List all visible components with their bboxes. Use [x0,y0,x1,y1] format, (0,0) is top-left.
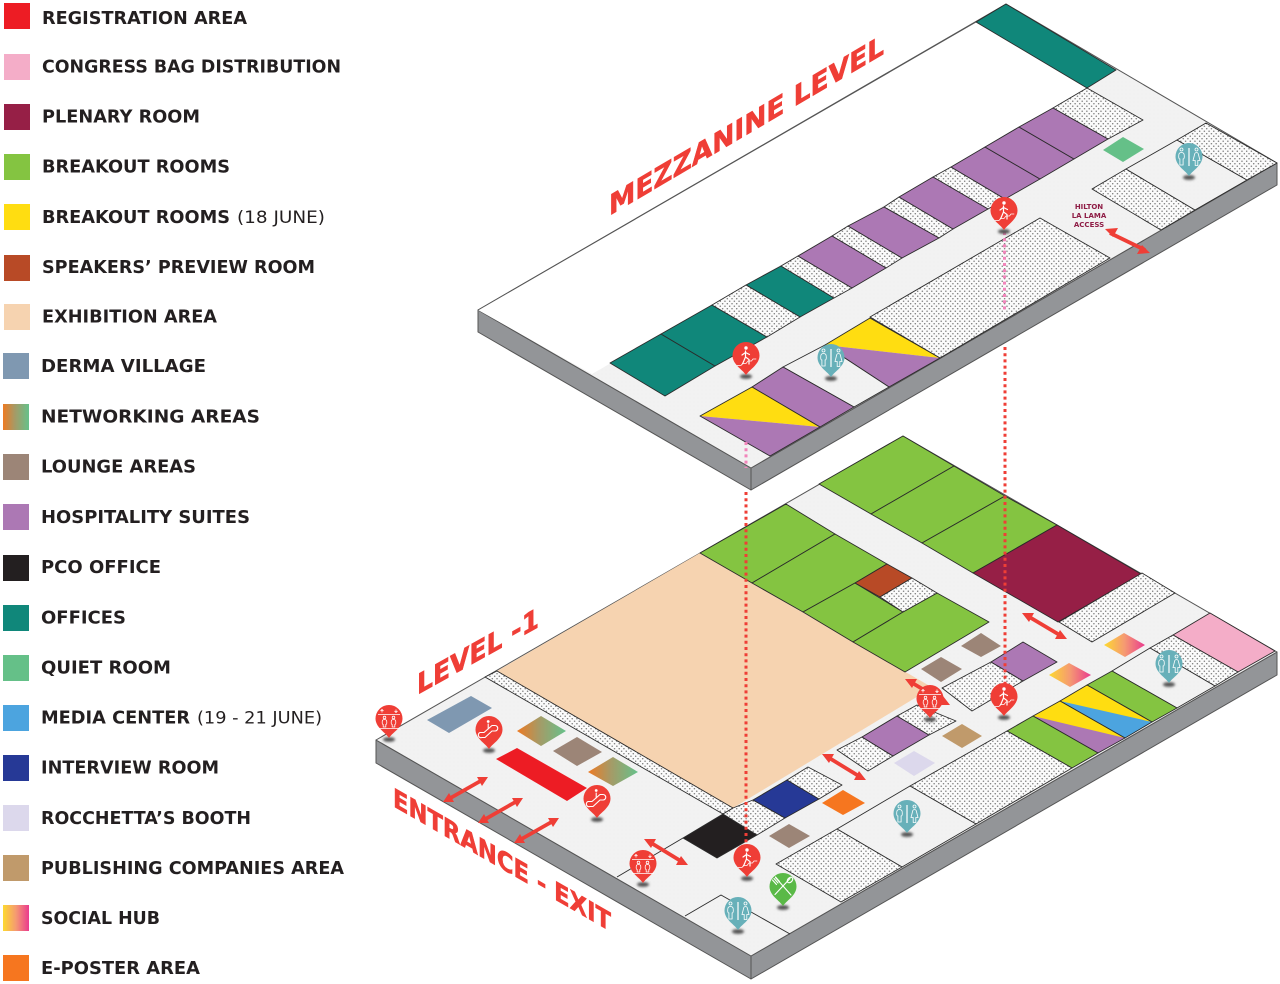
mezzanine slab [478,4,1277,490]
legend: lounge areas: LOUNGE AREAS [41,458,196,478]
hatched front room [776,829,902,902]
lounge area [961,633,1001,657]
lounge area [769,824,810,848]
social hub [1049,663,1091,687]
pin: escalator [584,785,610,822]
registration area [496,748,587,801]
breakout 18 june, lower [700,387,820,456]
connector: left red [744,492,748,845]
pin: toilets centre [894,800,920,837]
arrow: lift corridor [905,679,950,705]
networking area [588,757,638,786]
hospitality suites [798,108,1108,288]
title: mezzanine level: MEZZANINE LEVEL [609,29,884,223]
legend: derma village: DERMA VILLAGE [41,357,206,377]
legend: networking areas: NETWORKING AREAS [41,408,260,428]
toilets room right [1112,648,1215,708]
level -1 slab [376,436,1277,979]
pins [376,143,1202,934]
legend: quiet room: QUIET ROOM [41,658,171,678]
arrow: interview corridor [822,754,866,780]
legend: media center: MEDIA CENTER [41,708,191,728]
hatched room by lifts [942,662,1023,711]
legend: rocchetta's booth: ROCCHETTA’S BOOTH [41,809,251,829]
hatched room by interview [723,800,785,835]
arrow: entrance 1 [443,777,488,802]
legend: offices: OFFICES [41,608,126,628]
hatched front large room [910,731,1072,824]
hatched service room [880,578,937,612]
hospitality suite lower [752,367,854,427]
pin: toilets mezzanine right [1176,143,1202,180]
legend: quiet room [3,655,171,681]
pin: stairs level -1 left [734,844,760,881]
legend: social hub: SOCIAL HUB [41,909,160,929]
pin: restaurant [770,873,796,910]
congress bag distribution [1173,613,1275,672]
connector: right red [1004,347,1006,684]
connector: left pink [744,442,748,468]
pin: stairs mezzanine left [732,342,760,379]
pin: escalator [476,716,502,753]
arrow: entrance 3 [514,818,559,843]
pin: stairs level -1 right [990,683,1018,720]
quiet room [1103,137,1144,162]
legend: breakout rooms: BREAKOUT ROOMS [42,158,230,178]
legend: plenary room [4,104,200,130]
legend: breakout rooms 18 june: BREAKOUT ROOMS [42,208,230,228]
legend: breakout rooms 18 june: (18 JUNE) [237,208,325,228]
hilton la lama access label: HILTON [1075,203,1103,211]
legend: speakers preview room [4,255,315,281]
pin: toilets right [1156,650,1182,687]
networking area [517,716,566,746]
breakout 18 june, upper [825,318,940,387]
legend: rocchetta's booth [3,805,251,831]
legend: interview room [3,755,219,781]
derma village [427,696,492,733]
toilets room lower [783,345,889,407]
toilets room front [685,895,790,934]
legend: congress bag distribution [4,54,341,80]
offices back [976,4,1116,88]
pin: lift right [916,685,944,722]
legend: lounge areas [3,454,196,480]
void back edge line [478,22,976,310]
breakout rooms, left block [700,504,989,672]
connector lines between levels [746,232,1005,845]
legend: hospitality suites: HOSPITALITY SUITES [41,508,250,528]
panel: level -1 floor plan [376,436,1277,979]
large hatched area [870,218,1110,358]
open void [478,22,1087,374]
legend: publishing companies area [3,855,344,881]
hilton la lama access label: LA LAMA [1072,212,1107,220]
legend: publishing companies area: PUBLISHING COMPANIES AREA [41,859,344,879]
arrow: hilton access [1105,228,1150,254]
connector: right pink [1003,232,1006,311]
legend: derma village [3,353,206,379]
hospitality suite [862,716,929,756]
legend: pco office: PCO OFFICE [41,558,161,578]
breakout room front right [1087,671,1177,722]
pin: lift lobby [630,850,656,887]
legend: registration area: REGISTRATION AREA [42,9,247,29]
hatched corner room [1177,123,1277,180]
publishing companies area [942,724,982,748]
hatched room by lift [1092,169,1195,230]
toilets room centre [837,786,976,867]
legend: breakout rooms 18 june [4,204,325,230]
arrows [443,228,1150,865]
legend: speakers preview room: SPEAKERS’ PREVIEW ROOM [42,258,315,278]
legend: social hub [3,905,160,931]
breakout rooms, right block [819,436,1057,573]
pin: toilets mezzanine [818,344,844,381]
title: entrance - exit: ENTRANCE - EXIT [393,782,611,938]
hatched rooms [712,88,1143,337]
interview room [753,780,819,818]
legend: plenary room: PLENARY ROOM [42,108,200,128]
legend: offices [3,605,126,631]
hatched room near toilets [1150,635,1238,686]
hatched area behind plenary [1059,573,1175,642]
legend: media center [3,705,322,731]
legend [3,3,344,981]
hospitality suite [991,642,1057,681]
breakout 18 june and hospitality [1033,701,1125,753]
legend: registration area [4,3,247,29]
hilton la lama access label [1072,203,1107,229]
pin: lift entrance [376,705,402,742]
speakers preview room [855,564,912,597]
hatched room left of hospitality [837,737,893,771]
legend: e-poster area [3,955,200,981]
breakout room front [1007,716,1098,768]
panel: mezzanine level floor plan [478,4,1277,490]
title: level -1: LEVEL -1 [417,602,539,702]
lounge area [553,737,602,766]
exhibition area [497,553,928,808]
pin: toilets front [724,897,752,934]
entrance lobby wall [617,838,683,877]
toilets room [1126,140,1247,210]
legend: media center: (19 - 21 JUNE) [197,708,322,728]
pco office [683,814,757,858]
hatched room beside interview [787,767,842,799]
legend: breakout rooms [4,154,230,180]
hilton la lama access label: ACCESS [1074,221,1104,229]
hatched strip beside exhibition [485,671,733,814]
breakout 18 june and media center [1060,685,1152,738]
legend: pco office [3,555,161,581]
hatched room right of hospitality [897,705,956,735]
social hub [1104,633,1145,657]
legend: interview room: INTERVIEW ROOM [41,758,219,778]
e-poster area [822,790,865,815]
legend: congress bag distribution: CONGRESS BAG DISTRIBUTION [42,58,341,78]
pin: stairs mezzanine right [990,197,1018,234]
rocchetta's booth [894,751,935,776]
arrow: entrance 2 [478,798,523,823]
legend: exhibition area [4,304,217,330]
legend: hospitality suites [3,504,250,530]
arrow: plenary corridor [1022,613,1067,639]
legend: exhibition area: EXHIBITION AREA [42,308,217,328]
arrow: lobby [644,839,688,865]
legend: networking areas [3,404,260,430]
plenary room [973,525,1141,622]
lounge area [921,657,962,682]
legend: e-poster area: E-POSTER AREA [41,959,200,979]
offices [610,266,834,396]
